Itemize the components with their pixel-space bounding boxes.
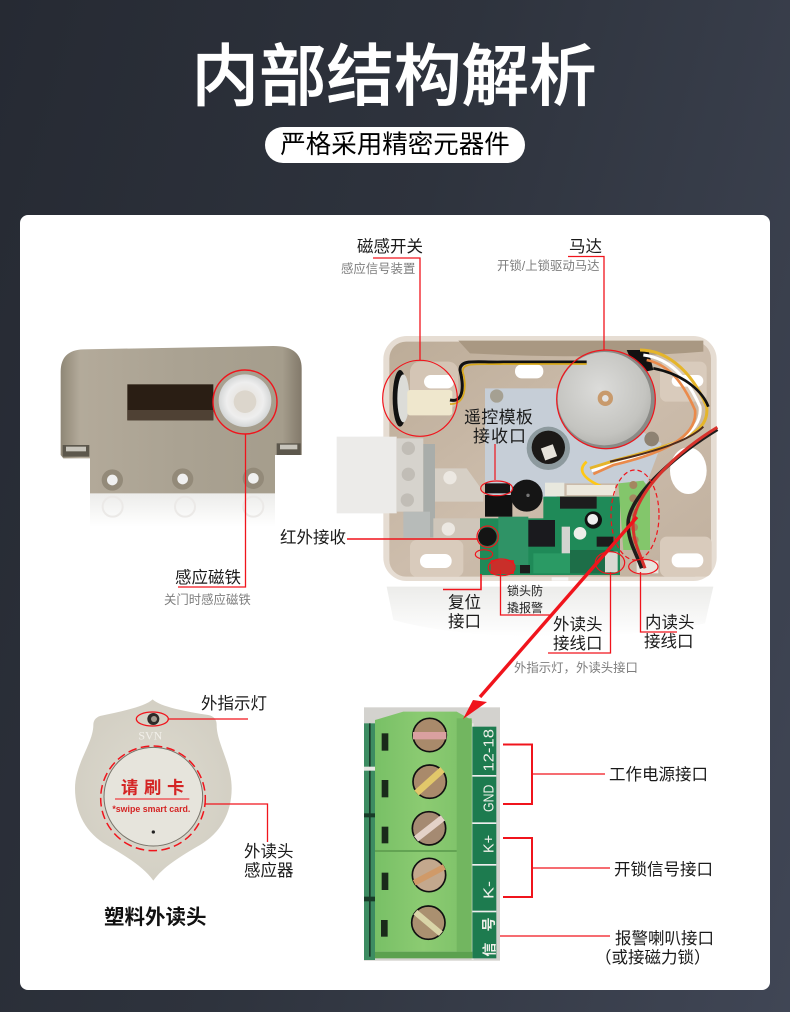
label: alarm horn port: 报警喇叭接口 [615,929,714,948]
photo: plastic outer reader: SVN [138,729,163,743]
motor wires [450,362,587,400]
pcb strip left [364,723,375,960]
label: reader sensor [205,804,294,880]
subtitle pill: 严格采用精密元器件 [280,131,510,159]
subtitle pill [265,127,525,163]
metal motor plate [485,388,662,498]
bracket: unlock signal [503,838,532,897]
label: tamper alarm: 锁头防 [507,583,543,598]
bracket: power [503,744,532,804]
label: outer indicator lamp [168,694,267,719]
label: induction magnet: 关门时感应磁铁 [164,592,251,607]
holes [424,375,454,388]
sensor disc [104,747,203,846]
photo: terminal block: K- [481,881,497,899]
dashed ring [101,746,205,851]
photo: plastic outer reader: *swipe smart card. [112,804,190,814]
label: outer reader terminal: 接线口 [553,634,602,653]
reader shield [75,699,232,881]
photo: plastic outer reader [75,699,232,881]
label: inner reader terminal: 接线口 [644,632,694,651]
photo: terminal block: 号 [481,917,497,931]
label: reset port: 复位 [448,593,481,612]
label: alarm horn port: （或接磁力锁） [595,948,710,967]
label: inner reader terminal: 内读头 [645,613,694,632]
label: magnetic switch [341,237,423,360]
label: remote module port: 接收口 [473,427,527,446]
note: outer reader port: 外指示灯，外读头接口 [514,660,638,675]
label: magnetic switch: 磁感开关 [357,237,423,256]
label: tamper alarm: 撬报警 [507,600,543,615]
panel: structure diagram [20,215,770,990]
label: motor: 开锁/上锁驱动马达 [497,258,600,273]
label: unlock signal port: 开锁信号接口 [614,860,713,879]
label: induction magnet: 感应磁铁 [175,568,241,587]
photo: terminal block: GND [481,785,497,812]
knob [527,427,570,470]
case [383,336,717,581]
title: 内部结构解析 [191,40,596,115]
LED [147,713,159,725]
label: alarm horn port [500,929,714,967]
label: infrared receiver: 红外接收 [280,528,346,547]
photo: terminal block: 信 [481,943,497,957]
LED marker [136,712,168,726]
photo: lock body [337,336,717,637]
label: magnetic switch: 感应信号装置 [341,261,415,276]
motor [627,350,653,373]
photo: terminal block: K+ [481,835,497,853]
label: reset port [443,574,481,631]
label: tamper alarm [500,570,550,615]
marker: strike plate magnet circle [213,370,277,434]
label: reader sensor: 感应器 [244,861,294,880]
label: outer reader terminal [548,572,610,653]
label: outer indicator lamp: 外指示灯 [201,694,267,713]
label: induction magnet [164,434,251,607]
green terminal on pcb [618,481,650,550]
label: remote module port: 遥控模板 [464,408,533,427]
body reflection [387,587,713,637]
label: outer reader terminal: 外读头 [553,615,602,634]
photo: terminal block: 12-18 [481,729,497,772]
photo: strike plate [61,346,302,527]
magnetic switch [393,370,407,427]
bolt tongue [337,437,400,513]
photo: plastic outer reader: 请刷卡 [121,777,190,797]
red-black cable [628,429,717,568]
label: reset port: 接口 [448,612,481,631]
label: reader sensor: 外读头 [244,842,294,861]
pcb [480,518,620,575]
label: motor: 马达 [569,237,602,256]
red markers [383,350,659,576]
label: work power port: 工作电源接口 [609,765,708,784]
label: remote module port [464,408,533,480]
latch bracket [397,438,423,512]
label: motor [497,237,604,350]
arrow: to terminal block [463,517,637,719]
heading: plastic outer reader: 塑料外读头 [104,906,206,929]
label: inner reader terminal [640,572,694,651]
photo: terminal block [364,707,500,961]
